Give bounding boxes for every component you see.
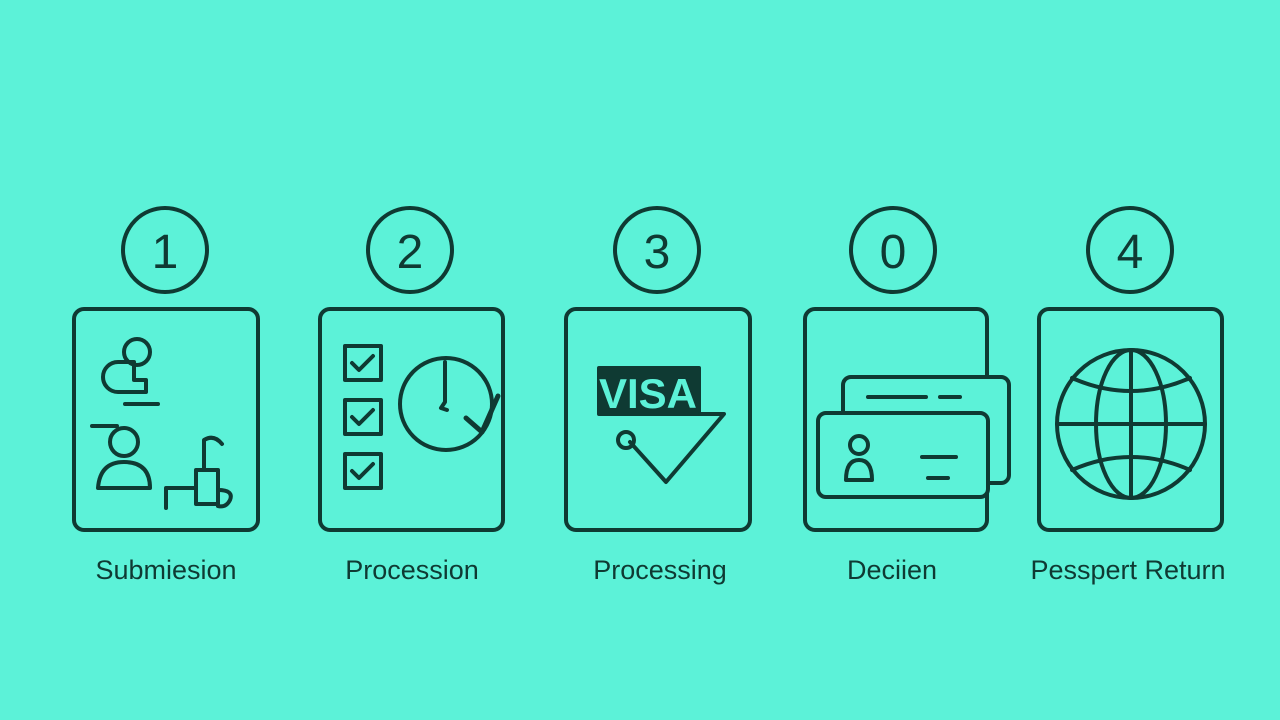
label: Submission: Submiesion [95, 555, 237, 585]
icon: checklist [345, 346, 381, 488]
label: Processing: Processing [593, 555, 727, 585]
number badge 4 [1088, 208, 1172, 292]
icon: visa stamp: VISA [599, 370, 697, 417]
number badge 3 [615, 208, 699, 292]
icon: clock [400, 358, 498, 450]
icon: people with documents [92, 339, 231, 508]
number badge 2 [368, 208, 452, 292]
icon: visa stamp [599, 368, 724, 482]
step 5: passport return [1030, 208, 1226, 585]
number badge 4: 4 [1117, 226, 1143, 279]
label: Passport Return: Pesspert Return [1030, 555, 1226, 585]
card 2 [320, 309, 503, 530]
card 1 [74, 309, 258, 530]
card 3 [566, 309, 750, 530]
number badge 0: 0 [880, 226, 906, 279]
step 4: decision [805, 208, 1009, 585]
number badge 1: 1 [152, 226, 178, 279]
icon: globe [1057, 350, 1205, 498]
number badge 3: 3 [644, 226, 670, 279]
number badge 1 [123, 208, 207, 292]
label: Procession: Procession [345, 555, 479, 585]
card 5 [1039, 309, 1222, 530]
step 3: processing [566, 208, 750, 585]
number badge 2: 2 [397, 226, 423, 279]
card 4 [805, 309, 987, 530]
icon: id cards [818, 377, 1009, 497]
step 1: submission [74, 208, 258, 585]
step 2: procession [320, 208, 503, 585]
number badge 0 [851, 208, 935, 292]
label: Decision: Deciien [847, 555, 937, 585]
